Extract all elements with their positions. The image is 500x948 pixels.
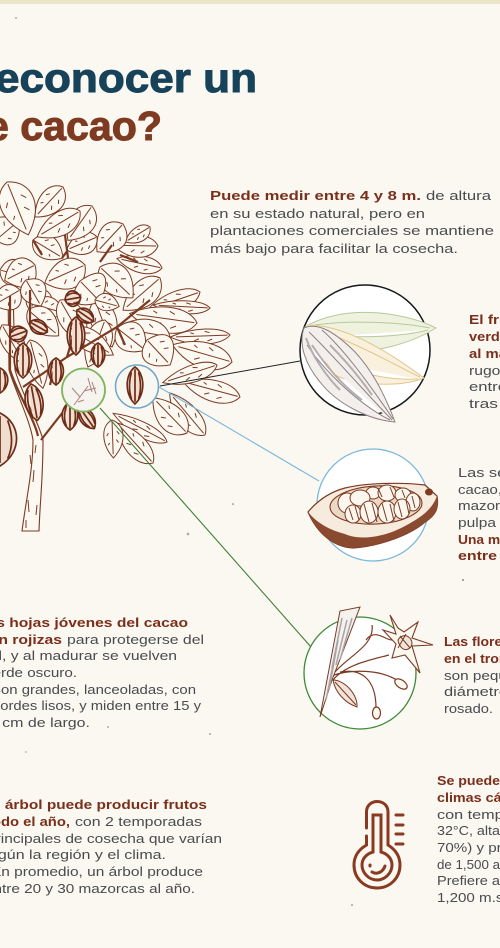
title (0, 55, 257, 149)
tree callout: fruit (116, 365, 158, 408)
text: flowers: rosado. (444, 701, 493, 716)
open pod shell (308, 483, 438, 548)
text: climate: Se puede (437, 773, 500, 788)
text: climate: Prefiere a (437, 873, 500, 888)
open flower (383, 615, 433, 673)
text: production: con 2 temporadas (75, 814, 202, 829)
beans (338, 485, 420, 523)
flower centre (398, 634, 412, 650)
pod lower rim (308, 496, 438, 548)
text: climate (437, 773, 500, 905)
bean cavity (329, 484, 423, 526)
flower stems (333, 625, 400, 708)
callout: height text: plantaciones comerciales se mantiene (210, 223, 494, 238)
yellow pod (308, 325, 424, 384)
text: climate: 32°C, alta (437, 823, 500, 838)
pod stem (425, 488, 433, 496)
text: flowers: diámetro (444, 684, 500, 699)
cacao pods on tree (0, 290, 105, 466)
connector line: seeds (159, 387, 319, 481)
flower buds (393, 677, 409, 691)
text: production (0, 797, 222, 896)
connector line: flowers (100, 408, 311, 647)
text: leaves: para protegerse del (67, 632, 204, 647)
illustration: cacao tree (0, 175, 243, 531)
text: leaves (0, 615, 204, 730)
grey pod shading (306, 338, 372, 400)
trunk hatching (326, 618, 352, 700)
trunk section (320, 607, 360, 717)
callout: height text: de altura (426, 188, 492, 203)
bean hatching (349, 487, 415, 522)
text: fruit (469, 312, 500, 411)
title: econocer un (0, 55, 257, 101)
dark branches (10, 235, 150, 440)
text: seeds: cacao, (458, 482, 500, 497)
icon: thermometer (354, 802, 403, 888)
callout: height text: Puede medir entre 4 y 8 m. (210, 188, 421, 203)
grey pod (302, 326, 395, 422)
tree callout: flower (62, 368, 105, 412)
text: seeds (458, 465, 500, 563)
text: flowers (444, 634, 500, 716)
connector line: fruit (160, 361, 300, 386)
text: seeds: pulpa (458, 515, 497, 530)
text: fruit: tras (469, 396, 499, 411)
leaves (0, 175, 243, 471)
detail circle: flowers (304, 607, 433, 729)
text: fruit: entre (469, 379, 500, 394)
flower leaf (333, 680, 357, 707)
detail circle: fruit (300, 285, 436, 422)
callout: height text (210, 188, 494, 256)
text: seeds: entre (458, 548, 497, 563)
callout: height text: más bajo para facilitar la cosecha. (210, 241, 458, 256)
green pod (305, 312, 436, 352)
callout: height text: en su estado natural, pero en (210, 206, 425, 221)
small flower sketch (72, 378, 96, 405)
text: climate: de 1,500 a (437, 857, 500, 872)
detail circle: seeds (308, 449, 438, 561)
tree trunk and branches (8, 290, 43, 531)
small pod sketch (127, 367, 143, 404)
top stripe (0, 0, 500, 4)
